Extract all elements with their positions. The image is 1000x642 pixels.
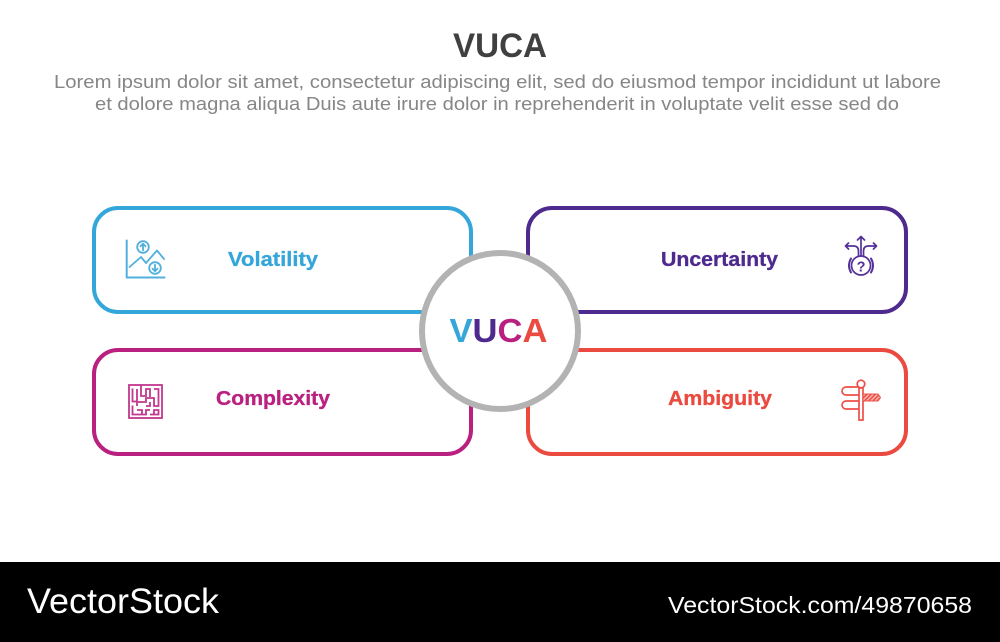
icon: volatility chart [127, 240, 164, 278]
label: ambiguity: Ambiguity [668, 388, 773, 410]
subtitle text block: Lorem ipsum dolor sit amet, consectetur adipiscing elit, sed do eiusmod tempor incididunt ut labore [54, 71, 941, 92]
icon: uncertainty arrows: ? [857, 260, 866, 276]
icon: signpost [842, 380, 880, 420]
label: uncertainty: Uncertainty [661, 249, 779, 271]
title: VUCA [453, 27, 547, 65]
panel: uncertainty [528, 208, 906, 312]
center circle [422, 253, 578, 409]
panel: ambiguity [528, 350, 906, 454]
icon: uncertainty arrows [846, 236, 876, 276]
panel: volatility [94, 208, 471, 312]
subtitle text block [54, 71, 941, 114]
icon: maze [129, 385, 162, 418]
footer url: VectorStock.com/49870658 [668, 592, 972, 618]
footer bar [0, 562, 1000, 642]
center VUCA wordmark: VUCA [450, 312, 548, 349]
label: volatility: Volatility [228, 249, 319, 271]
subtitle text block: et dolore magna aliqua Duis aute irure dolor in reprehenderit in voluptate velit esse sed do [95, 93, 899, 114]
footer logo: VectorStock [27, 582, 220, 621]
panel: complexity [94, 350, 471, 454]
label: complexity: Complexity [216, 388, 331, 410]
